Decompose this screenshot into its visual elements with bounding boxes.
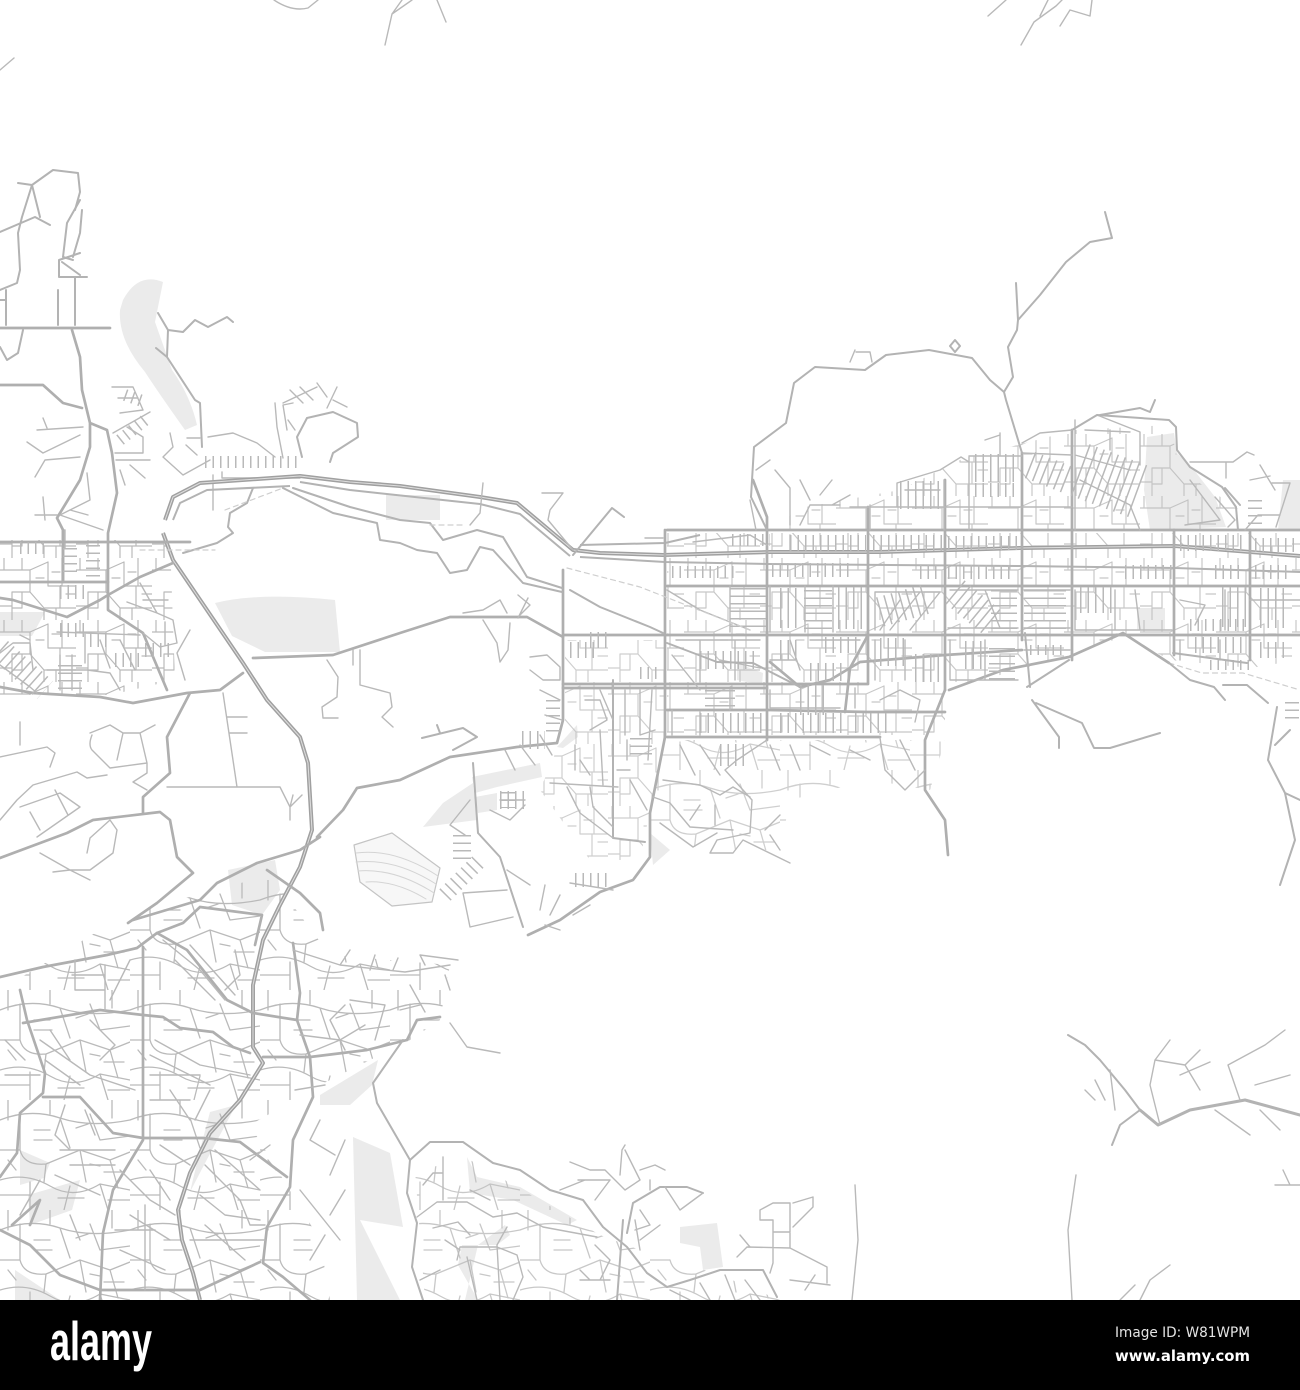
- eastern foothill roads: [1025, 633, 1300, 885]
- northwest hill roads: [0, 170, 233, 447]
- northern ridge road: [751, 212, 1240, 530]
- street texture: eastern city: [540, 425, 1300, 860]
- eastern city secondary streets: [667, 350, 1300, 790]
- central fan subdivisions: [0, 395, 770, 895]
- eastern creek roads: [1068, 1035, 1300, 1145]
- parks and open areas: [0, 279, 1300, 1300]
- north-south freeway: [163, 533, 312, 1300]
- creek side branches: [852, 1030, 1300, 1300]
- street texture: central foothills: [650, 740, 945, 850]
- creek-side valley roads: [183, 488, 800, 687]
- eastern city arterial grid: [317, 430, 1300, 935]
- northwest ridge arterial: [0, 328, 167, 690]
- website: www.alamy.com: [1115, 1347, 1250, 1365]
- central connector roads: [0, 530, 563, 930]
- railway dashed line: [140, 488, 1300, 690]
- contour field: [354, 833, 440, 906]
- south district streets: [417, 1145, 830, 1300]
- organic street texture: southwest city: [0, 875, 450, 1300]
- top edge road fragments: [0, 0, 1092, 70]
- south district roads: [373, 1040, 777, 1300]
- eastern city block streets: [672, 465, 1295, 755]
- northwest neighbourhood streets: [27, 383, 358, 548]
- central foothill streets: [0, 483, 790, 930]
- northern freeway: [165, 476, 1300, 572]
- black footer bar: [0, 1300, 1300, 1390]
- alamy logo: alamy: [50, 1310, 152, 1372]
- southwest arterial roads: [0, 907, 440, 1300]
- image id: Image ID: W81WPM: [1115, 1325, 1250, 1341]
- organic street texture: south district: [415, 1160, 780, 1300]
- southwest side streets: [5, 940, 500, 1290]
- street texture: western suburbs: [0, 540, 175, 695]
